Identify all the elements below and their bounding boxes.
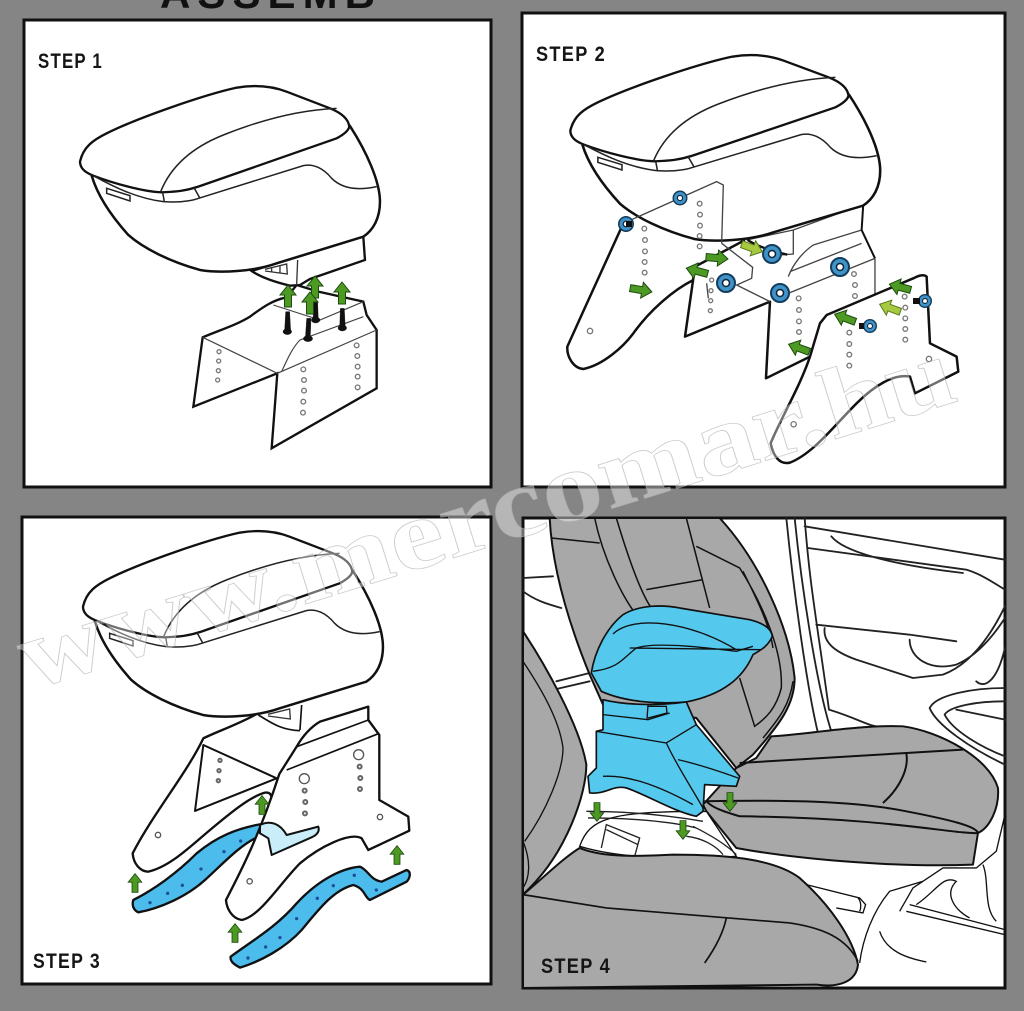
heading: step 1: STEP 1 [38,50,103,73]
bracket with screws [193,285,377,448]
door lines [523,518,1005,765]
arrows up [128,796,404,942]
passenger seat cushion [703,726,998,865]
exploded brackets [567,182,958,463]
brackets and blue strips [133,705,410,968]
armrest [570,55,880,255]
heading: step 2: STEP 2 [536,43,606,66]
arrows up [280,276,350,314]
right bracket [226,707,409,920]
bottom seat [523,848,858,988]
driver seat side [523,631,586,895]
car interior scene [523,518,1005,988]
heading: step 4: STEP 4 [541,955,611,978]
panel: step 4 [523,518,1005,988]
blue armrest [588,606,772,816]
backrest [550,518,795,768]
bolts and nuts [619,191,931,332]
armrest [83,531,383,719]
step 4 arrows [590,793,737,839]
panel: step 1 [24,20,491,487]
light blue strip seen through [260,823,319,855]
green arrows [629,237,913,359]
panel: step 3 [22,517,491,984]
left plate seen through armrest [587,182,723,334]
panel: step 2 [522,13,1005,487]
handbrake and gear [806,815,1005,963]
blue strip left [133,824,262,912]
watermark: www.mercomar.hu [4,315,967,711]
armrest [80,86,380,286]
console [580,811,736,858]
blue strip right [231,867,410,968]
heading: step 3: STEP 3 [33,950,101,973]
